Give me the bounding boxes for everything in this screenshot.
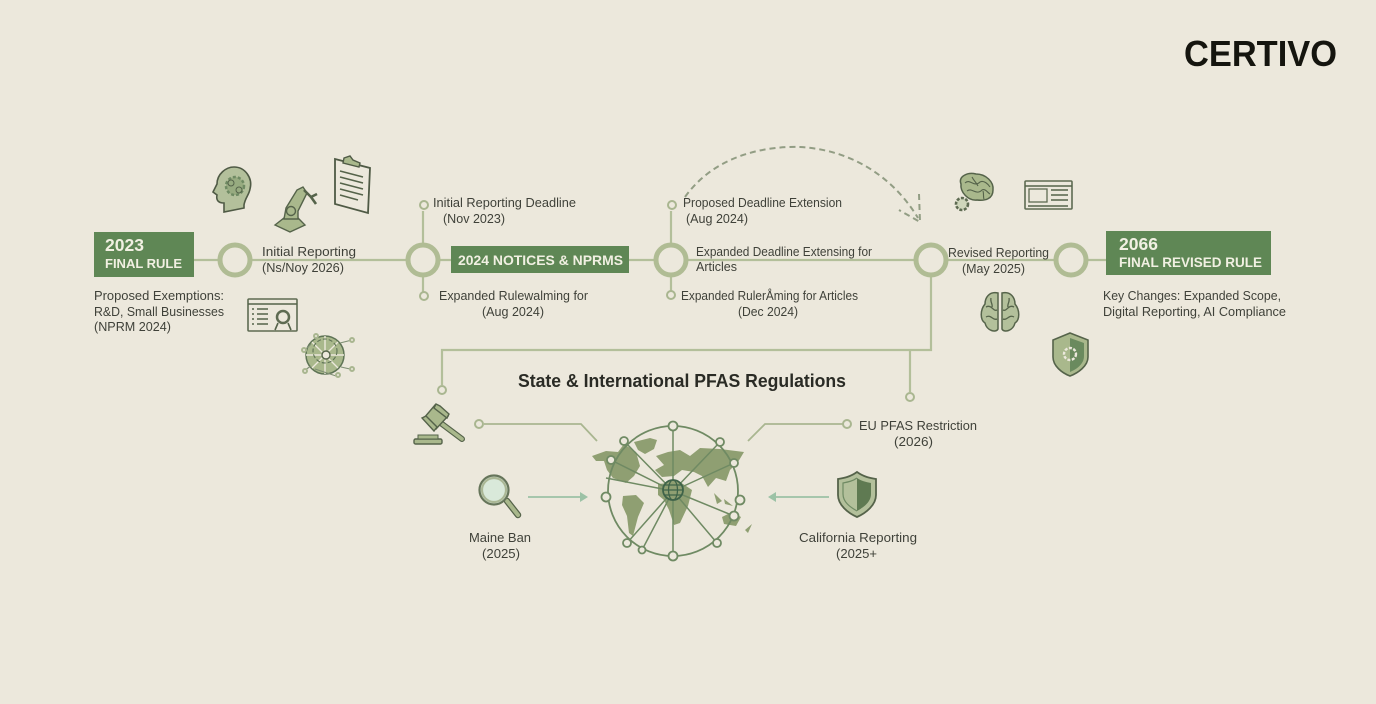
text: key changes (1103, 289, 1286, 319)
heading: state and international regulations: State & International PFAS Regulations (518, 371, 846, 391)
globe network (592, 422, 752, 560)
text: proposed exemptions: Proposed Exemptions: (94, 289, 224, 303)
network: spokes and ring (606, 426, 738, 556)
connector: EU to globe (748, 420, 851, 441)
icon: magnifying glass (480, 476, 518, 515)
text: key changes: Digital Reporting, AI Compliance (1103, 305, 1286, 319)
milestone: 2066 final revised rule: 2066 (1119, 234, 1158, 254)
text: initial reporting deadline (433, 196, 576, 226)
icon: robot arm (275, 187, 317, 232)
icon: document with badge (248, 299, 297, 331)
text: EU PFAS restriction: (2026) (894, 435, 933, 449)
text: Maine ban: Maine Ban (469, 531, 531, 545)
icon: gear shield (1053, 333, 1088, 376)
node: late 2024 ring with branches (656, 201, 686, 299)
connector: gavel to globe (475, 420, 597, 441)
text: initial reporting: (Ns/Noy 2026) (262, 261, 344, 275)
text: California reporting: California Reporting (799, 531, 917, 545)
icon: browser panel (1025, 181, 1072, 209)
text: key changes: Key Changes: Expanded Scope, (1103, 289, 1281, 303)
text: expanded deadline extending (696, 245, 872, 274)
milestone: 2023 final rule: FINAL RULE (105, 256, 182, 271)
icon: clipboard (335, 156, 370, 213)
milestone: 2023 final rule (94, 232, 194, 277)
text: initial reporting deadline: Initial Reporting Deadline (433, 196, 576, 210)
text: Maine ban (469, 531, 531, 561)
logo: CERTIVO: CERTIVO (1184, 33, 1337, 74)
text: initial reporting deadline: (Nov 2023) (443, 212, 505, 226)
text: expanded rulemaking for articles: (Dec 2024) (738, 305, 798, 319)
text: California reporting: (2025+ (836, 547, 877, 561)
milestone: 2024 notices and NPRMs: 2024 NOTICES & NPRMS (458, 252, 623, 268)
milestone: 2066 final revised rule: FINAL REVISED RULE (1119, 255, 1262, 270)
text: revised reporting (948, 246, 1049, 276)
node: final timeline ring (1056, 245, 1086, 275)
text: proposed exemptions: R&D, Small Businesses (94, 305, 224, 319)
icon: central hub (663, 480, 683, 500)
icon: brain with gear (956, 173, 993, 210)
text: revised reporting: (May 2025) (962, 262, 1025, 276)
node: revised reporting ring and state branch (438, 245, 946, 401)
icon: gavel (414, 404, 462, 444)
icon: head with gears (213, 167, 251, 212)
text: expanded rulemaking for articles: Expanded RulerÅming for Articles (681, 288, 858, 303)
text: proposed exemptions: (NPRM 2024) (94, 320, 171, 334)
milestone: 2023 final rule: 2023 (105, 235, 144, 255)
text: expanded deadline extending: Articles (696, 260, 737, 274)
text: expanded rulemaking: (Aug 2024) (482, 305, 544, 319)
text: EU PFAS restriction (859, 419, 977, 449)
text: Maine ban: (2025) (482, 547, 520, 561)
text: proposed deadline extension: (Aug 2024) (686, 212, 748, 226)
text: expanded rulemaking: Expanded Rulewalming for (439, 289, 588, 303)
text: EU PFAS restriction: EU PFAS Restriction (859, 419, 977, 433)
arrow: California to globe (768, 492, 829, 502)
timeline main line (194, 259, 1106, 261)
icon: circuit brain (302, 334, 354, 377)
text: initial reporting: Initial Reporting (262, 245, 356, 259)
arrow: dashed arc (685, 147, 920, 222)
text: proposed deadline extension: Proposed Deadline Extension (683, 196, 842, 210)
network: nodes (602, 422, 744, 560)
text: expanded rulemaking (439, 289, 588, 319)
text: expanded rulemaking for articles (681, 288, 858, 319)
node: 2024 start ring with branches (408, 201, 438, 300)
text: expanded deadline extending: Expanded Deadline Extensing for (696, 245, 872, 259)
icon: green shield (838, 472, 876, 517)
text: California reporting (799, 531, 917, 561)
arrow: Maine to globe (528, 492, 588, 502)
milestone: 2066 final revised rule (1106, 231, 1271, 275)
icon: brain (981, 293, 1019, 331)
text: initial reporting (262, 245, 356, 275)
node: first timeline ring (220, 245, 250, 275)
milestone: 2024 notices and NPRMs (451, 246, 629, 273)
text: revised reporting: Revised Reporting (948, 246, 1049, 260)
text: proposed deadline extension (683, 196, 842, 226)
text: proposed exemptions (94, 289, 224, 334)
map: continents (592, 438, 752, 536)
